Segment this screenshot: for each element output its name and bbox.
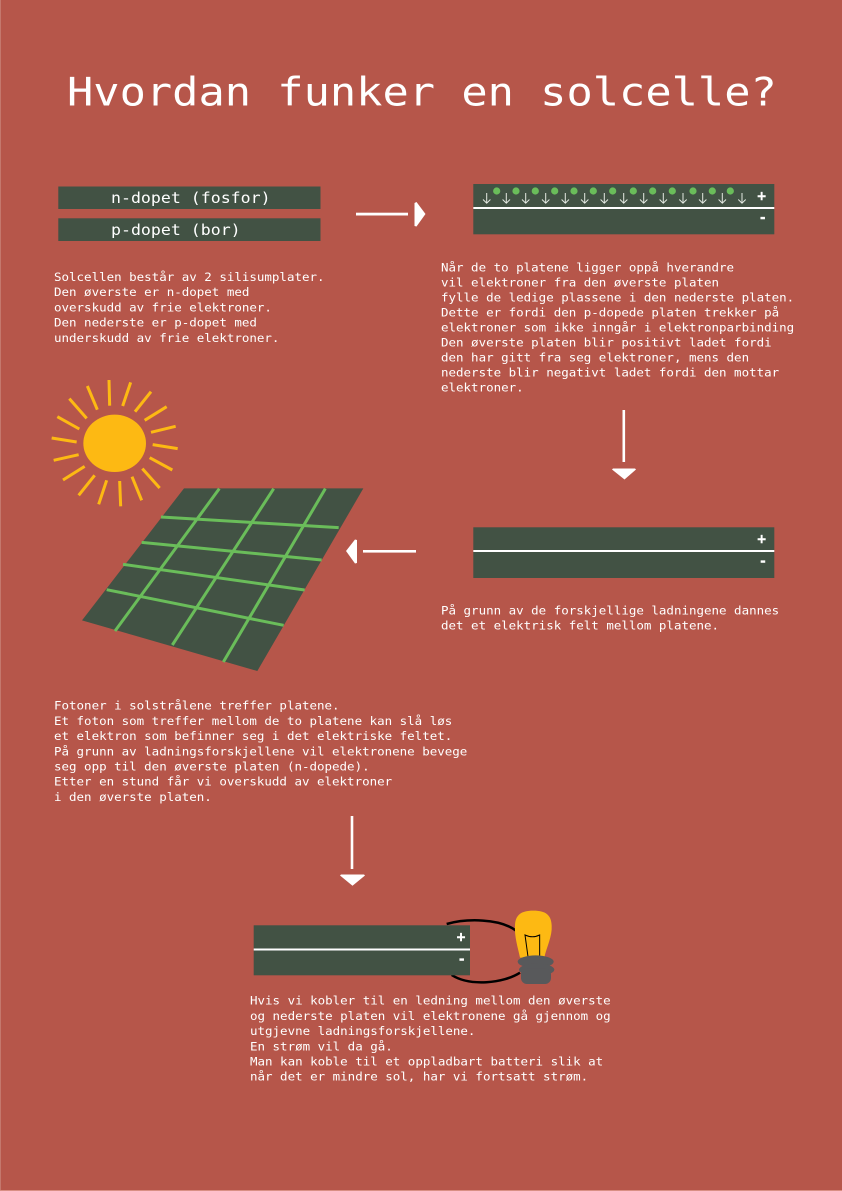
icon: light bulb (515, 911, 554, 984)
title: Hvordan funker en solcelle? (67, 70, 777, 115)
panel: plates with electrons moving (473, 184, 774, 234)
arrow: left (346, 540, 416, 564)
icon: solar panel (82, 488, 363, 671)
text block: plates together: Når de to platene ligger oppå hverandre (441, 261, 734, 274)
p-doped plate (58, 218, 321, 241)
text block: photons: i den øverste platen. (54, 790, 212, 804)
n-doped plate (58, 186, 321, 209)
arrow: right (356, 202, 426, 226)
text block: plates together: Dette er fordi den p-dopede platen trekker på (441, 306, 779, 319)
minus sign: - (459, 953, 464, 968)
text block: plates intro: underskudd av frie elektroner. (54, 331, 279, 345)
text block: photons: et elektron som befinner seg i det elektriske feltet. (54, 729, 452, 743)
icon: sun (52, 380, 178, 506)
text block: plates together: elektroner. (441, 381, 524, 394)
panel: two separate plates (58, 186, 321, 241)
text block: circuit: Man kan koble til et oppladbart batteri slik at (250, 1055, 603, 1068)
plus sign: + (757, 532, 767, 546)
text block: plates together: fylle de ledige plassene i den nederste platen. (441, 291, 794, 304)
text block: plates together: nederste blir negativt ladet fordi den mottar (441, 366, 779, 379)
text block: plates intro: overskudd av frie elektroner. (54, 301, 272, 314)
p-doped plate: p-dopet (bor) (111, 221, 241, 239)
text block: circuit: Hvis vi kobler til en ledning mellom den øverste (250, 994, 611, 1008)
text block: electric field: På grunn av de forskjellige ladningene dannes (441, 604, 779, 617)
text block: plates together: elektroner som ikke inngår i elektronparbinding (441, 321, 794, 334)
electrons (493, 187, 734, 195)
text block: plates intro: Den øverste er n-dopet med (54, 285, 249, 299)
text block: circuit: når det er mindre sol, har vi fortsatt strøm. (250, 1070, 588, 1084)
minus sign: - (760, 555, 766, 570)
text block: circuit: utgjevne ladningsforskjellene. (250, 1024, 475, 1038)
text block: photons: På grunn av ladningsforskjellene vil elektronene bevege (54, 745, 467, 758)
text block: circuit: En strøm vil da gå. (250, 1040, 393, 1053)
plus sign: + (757, 189, 767, 203)
arrow: down (340, 816, 365, 886)
arrow: down (612, 410, 636, 480)
text block: plates intro: Den nederste er p-dopet med (54, 316, 257, 330)
text block: plates together: vil elektroner fra den øverste platen (441, 276, 719, 289)
text block: plates together: den har gitt fra seg elektroner, mens den (441, 351, 749, 364)
text block: plates intro: Solcellen består av 2 silisumplater. (54, 270, 325, 284)
panel: plates with electric field (473, 527, 774, 578)
text block: photons: Etter en stund får vi overskudd av elektroner (54, 775, 392, 789)
electron arrows (483, 193, 746, 203)
plus sign: + (456, 930, 466, 944)
text block: photons: Fotoner i solstrålene treffer platene. (54, 699, 340, 713)
plates (254, 925, 470, 975)
panel: plates connected to lamp (254, 911, 554, 984)
text block: plates together: Den øverste platen blir positivt ladet fordi (441, 336, 772, 349)
text block: electric field: det et elektrisk felt mellom platene. (441, 619, 719, 632)
wires (447, 920, 520, 982)
text block: photons: Et foton som treffer mellom de to platene kan slå løs (54, 714, 452, 728)
n-doped plate: n-dopet (fosfor) (111, 189, 271, 207)
minus sign: - (760, 211, 765, 226)
text block: circuit: og nederste platen vil elektronene gå gjennom og (250, 1009, 611, 1023)
text block: photons: seg opp til den øverste platen (n-dopede). (54, 760, 370, 773)
